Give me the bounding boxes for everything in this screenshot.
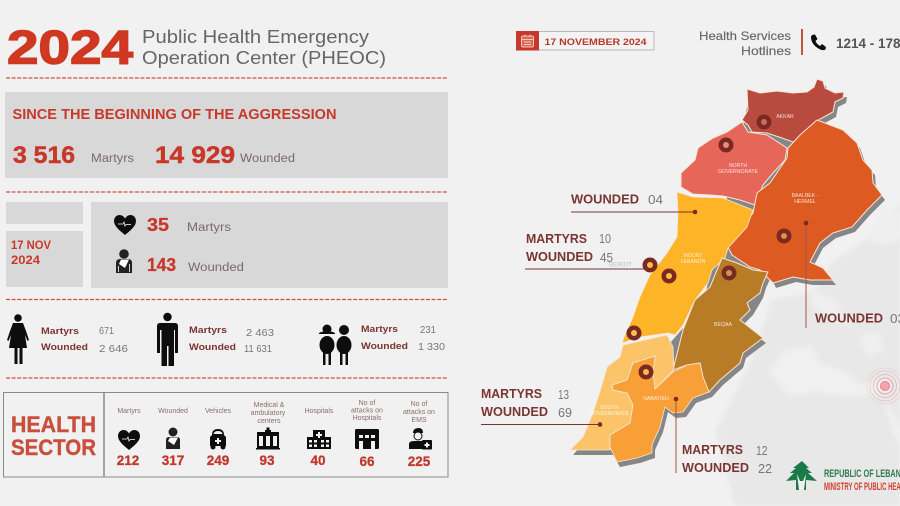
stat: hospitals [305,408,334,468]
region: Akkar [742,79,844,142]
region names: AKKAR [776,114,794,120]
callout: Nabatieh: WOUNDED [682,460,749,475]
callout: South: 69 [558,406,572,420]
stat: martyrs [117,408,141,468]
panel: since the beginning of the aggression: SINCE THE BEGINNING OF THE AGGRESSION [12,107,336,123]
callout: Nabatieh: MARTYRS [682,442,743,457]
region names: SOUTH [600,405,618,411]
demographic: men: 11 631 [244,343,272,355]
region names: NABATIEH [643,396,669,402]
callout: Nabatieh: 12 [756,444,768,458]
stat: medical and ambulatory centers: Medical & [254,402,285,409]
stat: attacks on EMS: 225 [408,454,431,469]
date badge: 17 NOVEMBER 2024 [544,37,647,48]
callout: South [481,386,602,427]
stat: hospitals: Hospitals [305,408,334,415]
callout: Nabatieh [674,397,772,476]
panel: daily casualties: 143 [147,254,176,275]
region names: HERMEL [794,199,816,205]
stat: martyrs: Martyrs [117,408,141,415]
demographic: men: 2 463 [246,327,274,339]
demographic: children [319,324,445,365]
icon: wounded person [116,249,132,273]
callout: South: 13 [558,388,569,402]
region names: GOVERNORATE [589,411,630,417]
stat: attacks on hospitals: attacks on [351,408,383,414]
callout: Baalbek-Hermel [804,221,900,328]
stat: wounded: Wounded [158,408,188,415]
demographic: women [7,314,128,364]
panel: since the beginning of the aggression: 3 516 [13,142,75,169]
stat: wounded: 317 [162,453,184,468]
hotlines [699,29,900,58]
stat: attacks on hospitals [351,400,383,469]
demographic: men: Wounded [189,342,236,353]
icon: calendar [522,34,534,47]
region: Mount Lebanon [622,192,753,343]
region: Baalbek-Hermel [728,120,882,283]
demographic: women: Martyrs [41,326,79,337]
stat: attacks on EMS: attacks on [403,409,435,416]
panel: blank date tab [6,202,83,224]
panel: since the beginning of the aggression: Wounded [240,153,295,165]
region names [589,114,819,417]
map shadow [573,84,885,467]
stat: martyrs: 212 [117,453,139,468]
stat: vehicles: 249 [207,453,229,468]
stat: attacks on hospitals: Hospitals [353,415,382,422]
stat: vehicles: Vehicles [205,408,232,415]
panel: date [6,231,83,287]
callout: Beirut: 45 [600,251,613,265]
stat: attacks on hospitals: No of [359,400,375,407]
heading: health sector: SECTOR [11,435,96,460]
region: Beqaa [673,258,768,392]
logo: Ministry of Public Health [786,461,900,493]
panel: date: 17 NOV [11,240,51,252]
callout: Mount Lebanon north wounded: 04 [648,193,663,207]
hotlines: Hotlines [741,44,791,58]
panel: since the beginning of the aggression: 14 929 [155,142,235,169]
callout: Baalbek-Hermel: WOUNDED [815,310,883,326]
callout: Nabatieh: 22 [758,462,772,476]
callout: Beirut: 10 [599,232,611,246]
icon: cedar [786,461,817,490]
stat: attacks on EMS [403,401,435,469]
demographic: men [157,313,274,366]
title: organisation name: Public Health Emergency [142,26,370,47]
title: organisation name [142,26,386,68]
stat: medical and ambulatory centers: centers [258,418,281,425]
region: North Governorate [681,122,787,205]
panel: health sector [4,392,448,477]
heading: health sector: HEALTH [11,412,96,437]
panel: since the beginning of the aggression: Martyrs [91,153,134,165]
map of Lebanon [570,79,885,467]
region: South Governorate [570,335,674,450]
stat: attacks on EMS: EMS [411,417,427,424]
demographic: women: 671 [99,325,114,337]
demographic: children: Wounded [361,341,408,352]
epicentre rings [867,368,900,404]
demographic: women: 2 646 [99,343,128,355]
panel: daily casualties [91,202,448,288]
stat: hospitals: 40 [310,453,326,468]
icon: woman [7,314,29,364]
callout: Mount Lebanon north wounded [571,192,697,214]
callout: South: MARTYRS [481,386,542,401]
panel: since the beginning of the aggression [5,92,448,178]
icon: man [157,313,178,366]
demographic: children: Martyrs [361,324,398,335]
panel: date: 2024 [11,255,41,267]
background world map [719,242,898,504]
region names: BEQAA [714,322,732,328]
stat: attacks on hospitals: 66 [359,454,375,469]
demographic: men: Martyrs [189,325,227,336]
icon: children [319,324,352,365]
date badge [516,31,654,50]
callout: Beirut: BEIRUT [609,262,632,268]
region names: MOUNT [683,253,703,259]
region names: NORTH [729,163,747,169]
region names: LEBANON [681,259,706,265]
heading: health sector [11,416,96,456]
title: 2024: 2024 [7,20,133,74]
panel: daily casualties: Wounded [188,262,244,274]
region names: GOVERNORATE [718,169,759,175]
stat: medical and ambulatory centers: ambulatory [251,410,286,417]
stat: attacks on EMS: No of [411,401,427,408]
stat: wounded [158,408,188,468]
panel: daily casualties: 35 [147,214,169,235]
callout: Mount Lebanon north wounded: WOUNDED [571,192,639,206]
region names: BAALBEK - [792,193,819,199]
title: organisation name: Operation Center (PHEOC) [142,47,386,68]
hotlines: Health Services [699,29,791,43]
callout: South: WOUNDED [481,404,548,419]
demographic: women: Wounded [41,342,88,353]
callout: Beirut: WOUNDED [526,249,593,264]
stat: medical and ambulatory centers [251,402,286,468]
callout: Beirut: MARTYRS [526,231,587,246]
callout: Beirut [525,231,648,269]
region: Nabatieh [610,356,709,462]
icon: heart [114,215,136,235]
icon: phone [811,34,826,50]
stat: medical and ambulatory centers: 93 [259,453,275,468]
demographic: children: 231 [420,324,436,336]
demographic: children: 1 330 [418,341,445,353]
pins [626,114,792,380]
panel: daily casualties: Martyrs [187,222,231,234]
stat: vehicles [205,408,232,468]
